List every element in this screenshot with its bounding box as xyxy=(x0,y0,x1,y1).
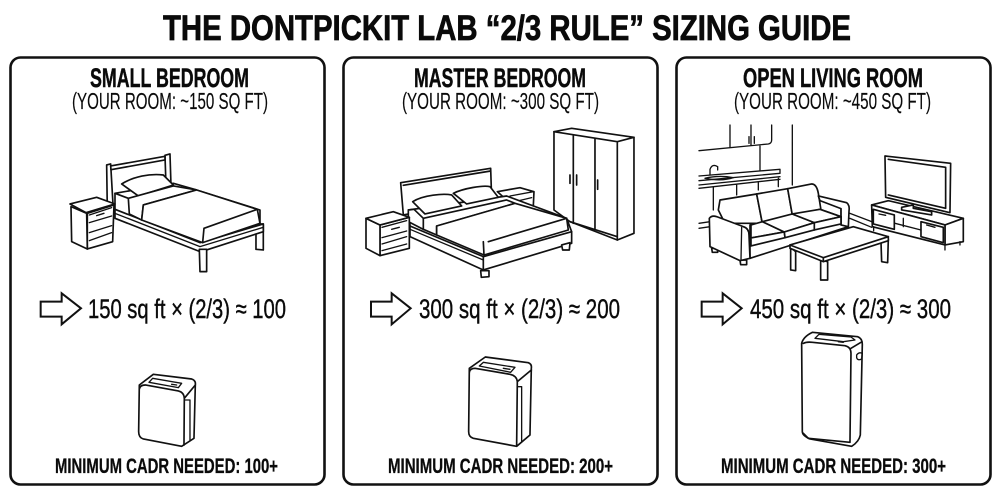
arrow: open living room xyxy=(702,293,742,324)
arrow: small bedroom xyxy=(41,293,81,324)
panel: small bedroom xyxy=(10,58,324,484)
heading: small bedroom: SMALL BEDROOM xyxy=(90,63,249,93)
title: THE DONTPICKIT LAB “2/3 RULE” SIZING GUIDE xyxy=(163,9,851,48)
icon: tall air purifier xyxy=(802,332,862,446)
room size: master bedroom: (YOUR ROOM: ~300 SQ FT) xyxy=(402,88,599,114)
arrow: master bedroom xyxy=(371,293,411,324)
formula: master bedroom: 300 sq ft × (2/3) ≈ 200 xyxy=(419,294,620,324)
panel: master bedroom xyxy=(344,58,658,484)
icon: double bed, nightstands and wardrobe xyxy=(366,128,634,277)
sofa xyxy=(709,184,849,265)
formula: small bedroom: 150 sq ft × (2/3) ≈ 100 xyxy=(88,294,286,324)
heading: master bedroom: MASTER BEDROOM xyxy=(414,63,586,93)
icon: sofa, kitchen, TV and coffee table xyxy=(699,125,963,280)
icon: single bed and nightstand xyxy=(70,154,263,272)
room size: small bedroom: (YOUR ROOM: ~150 SQ FT) xyxy=(72,88,268,114)
label: minimum cadr 100: MINIMUM CADR NEEDED: 100+ xyxy=(55,454,278,478)
icon: medium air purifier xyxy=(469,357,531,446)
icon: small air purifier xyxy=(139,374,195,446)
label: minimum cadr 200: MINIMUM CADR NEEDED: 200+ xyxy=(388,454,613,478)
panel: open living room xyxy=(676,58,990,484)
